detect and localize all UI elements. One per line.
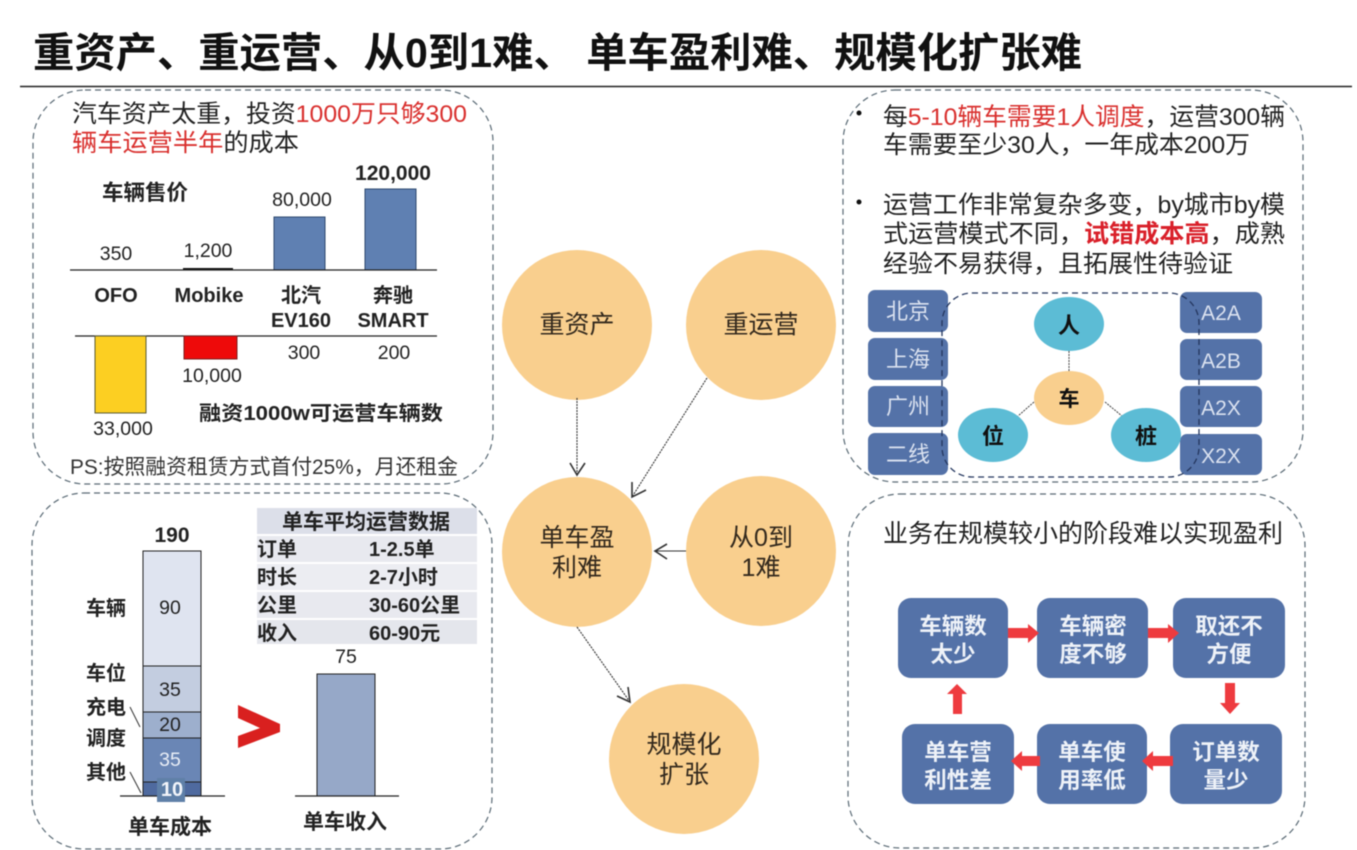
panel: cost vs revenue per vehicle [32,493,492,849]
node: zero to one hard [686,476,836,626]
flow box: low density: 车辆密 [1059,613,1127,639]
table: average operating data [257,508,477,645]
arrow: zero-to-one to profit [655,544,686,559]
bar chart: vehicle price: 1,200 [184,240,233,262]
category labels: SMART [357,310,429,332]
table: average operating data: 2-7小时 [369,566,438,589]
mode tags: X2X [1201,445,1241,468]
table: average operating data: 收入 [257,622,297,645]
bar chart: vehicles operable with 10M financing: 33,000 [93,418,153,440]
node: per-vehicle profit hard: 利难 [552,554,602,582]
node: scaling [609,684,759,834]
icon: greater-than sign [238,705,280,748]
stacked bar: per vehicle cost: 190 [154,524,190,547]
node: zero to one hard: 从0到 [729,524,793,552]
panel heading: asset too heavy [72,100,467,157]
city tags: 上海 [886,347,930,372]
footnote: PS:按照融资租赁方式首付25%，月还租金 [70,456,458,479]
stacked bar: per vehicle cost: 车辆 [86,596,126,620]
mode tags: A2A [1201,302,1241,325]
flow box: inconvenient pickup [1173,598,1285,678]
flow box: poor profitability [902,724,1014,804]
diagram: causal circles [502,250,836,834]
bullet list [856,103,1285,278]
bullet list: 每5-10辆车需要1人调度，运营300辆 [883,103,1285,131]
table: average operating data: 30-60公里 [369,595,460,617]
node: heavy assets [502,250,652,400]
flow box: too few vehicles: 太少 [930,642,976,667]
table: average operating data: 单车平均运营数据 [282,511,450,534]
stacked bar: per vehicle cost: 35 [159,679,181,701]
node: heavy operations: 重运营 [723,311,799,339]
panel heading: 业务在规模较小的阶段难以实现盈利 [883,520,1283,548]
bullet list: 车需要至少30人，一年成本200万 [883,131,1250,159]
flow box: low density [1037,598,1148,678]
arrow: heavy operations to profit [632,378,707,497]
panel heading: asset too heavy: 汽车资产太重，投资1000万只够300 [72,100,467,128]
flow box: few orders: 订单数 [1192,740,1260,765]
hub diagram: person vehicle spot pile: 桩 [1135,424,1157,449]
red loop arrows [947,624,1240,771]
flow box: poor profitability: 单车营 [924,740,992,765]
node: zero to one hard: 1难 [742,554,780,582]
panel: vehicle asset costs [33,90,493,484]
flow box: low utilisation [1037,724,1147,804]
category labels: Mobike [175,285,243,307]
bullet list: 式运营模式不同，试错成本高，成熟 [883,220,1285,248]
stacked bar: per vehicle cost: 充电 [86,696,126,719]
panel: small scale profit loop [848,494,1305,848]
stacked bar: per vehicle cost: 单车成本 [128,815,212,839]
flow box: inconvenient pickup: 方便 [1206,641,1252,667]
node: heavy assets: 重资产 [539,311,615,339]
bar chart: vehicles operable with 10M financing: 10,000 [182,365,242,387]
table: average operating data: 时长 [257,566,297,589]
flow box: low density: 度不够 [1059,642,1127,667]
stacked bar: per vehicle cost: 调度 [86,727,126,750]
city tags: 北京 [886,299,930,324]
city tags [868,290,948,475]
flow box: low utilisation: 单车使 [1058,740,1126,765]
arrow: heavy assets to profit [570,398,585,475]
stacked bar: per vehicle cost: 其他 [86,761,126,784]
node: per-vehicle profit hard [502,477,652,627]
category labels: OFO [94,285,138,307]
category labels: 北汽 [281,284,321,307]
bar chart: per vehicle revenue: 单车收入 [303,811,387,834]
stacked bar: per vehicle cost [86,524,225,839]
node: heavy operations [686,250,836,400]
title: 重资产、重运营、从0到1难、 单车盈利难、规模化扩张难 [33,30,1082,76]
panel heading: asset too heavy: 辆车运营半年的成本 [72,129,299,157]
hub diagram: person vehicle spot pile: 人 [1058,313,1080,338]
bar chart: vehicles operable with 10M financing [75,336,443,440]
table: average operating data: 订单 [257,538,297,561]
hub diagram: person vehicle spot pile [958,297,1181,462]
mode tags: A2B [1201,350,1241,373]
bullet list: 运营工作非常复杂多变，by城市by模 [883,191,1285,219]
flow box: poor profitability: 利性差 [924,768,992,793]
flow box: inconvenient pickup: 取还不 [1195,614,1263,639]
stacked bar: per vehicle cost: 35 [159,749,181,771]
bar chart: vehicle price: 120,000 [355,162,431,185]
category labels: EV160 [271,310,331,332]
flow box: few orders [1170,724,1282,804]
category labels: 奔驰 [373,284,413,307]
bar chart: vehicles operable with 10M financing: 融资1000w可运营车辆数 [199,401,443,425]
bar chart: vehicle price: 350 [100,243,132,265]
arrow: profit to scaling [577,627,630,702]
table: average operating data: 公里 [257,595,297,617]
city tags: 广州 [886,394,930,419]
stacked bar: per vehicle cost: 90 [159,597,181,619]
bar chart: vehicles operable with 10M financing: 200 [378,342,410,364]
hub diagram: person vehicle spot pile: 车 [1058,388,1080,411]
stacked bar: per vehicle cost: 车位 [86,661,126,685]
bar chart: per vehicle revenue: 75 [335,646,357,668]
flow box: few orders: 量少 [1203,768,1249,793]
node: per-vehicle profit hard: 单车盈 [539,524,615,552]
stacked bar: per vehicle cost: 20 [159,714,181,736]
table: average operating data: 60-90元 [369,623,440,645]
panel: operations complexity [843,90,1303,482]
bar chart: vehicle price [70,162,437,270]
flow box: low utilisation: 用率低 [1058,768,1126,793]
node: scaling: 扩张 [659,761,709,789]
bullet list: 经验不易获得，且拓展性待验证 [883,250,1233,278]
flow box: too few vehicles: 车辆数 [919,614,987,639]
mode tags [1180,292,1262,475]
city tags: 二线 [886,442,930,467]
mode tags: A2X [1201,397,1241,420]
bar chart: vehicle price: 车辆售价 [102,181,188,205]
bar chart: per vehicle revenue [295,646,399,834]
node: scaling: 规模化 [646,731,722,759]
table: average operating data: 1-2.5单 [369,538,435,561]
bar chart: vehicles operable with 10M financing: 300 [288,342,320,364]
dashed frame around core elements [942,293,1199,477]
flow box: too few vehicles [898,598,1008,678]
category labels [94,284,429,332]
bar chart: vehicle price: 80,000 [272,189,332,211]
stacked bar: per vehicle cost: 10 [161,779,183,801]
hub diagram: person vehicle spot pile: 位 [982,424,1004,449]
